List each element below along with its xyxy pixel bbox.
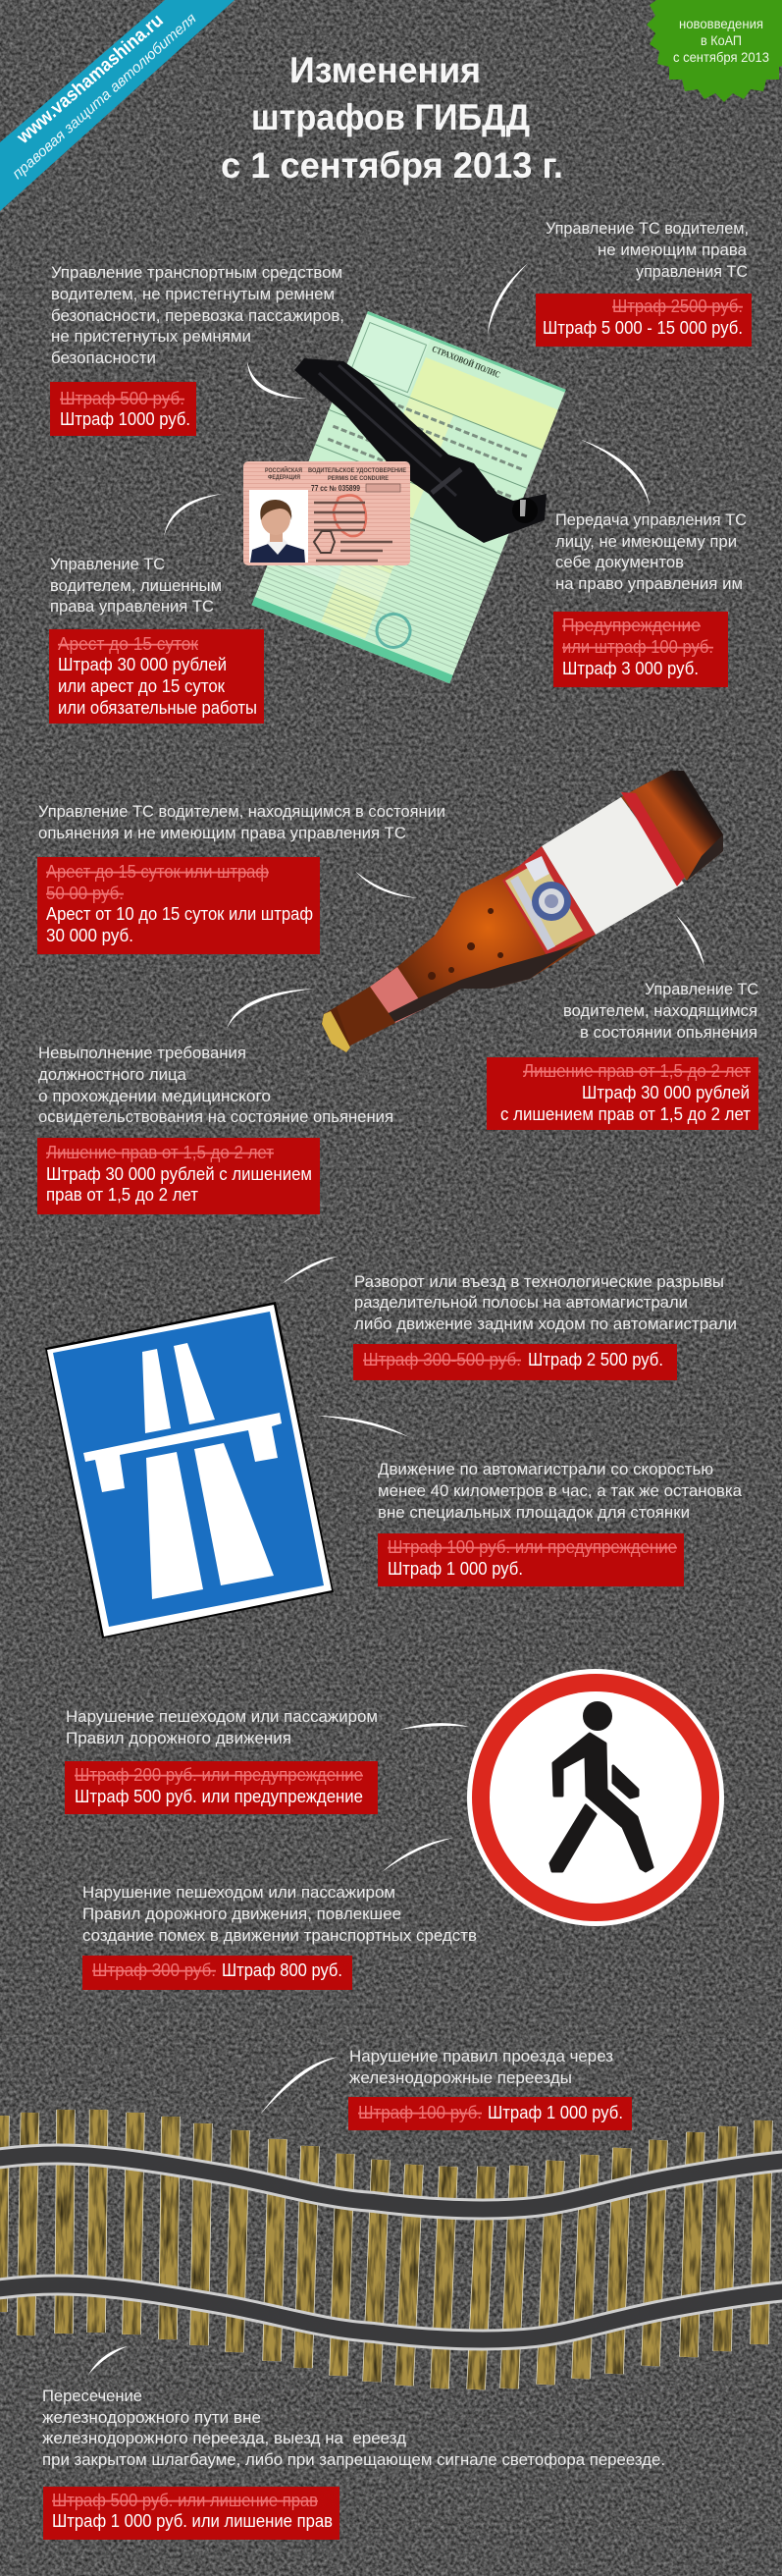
callout: seat belt violation: Штраф 1000 руб. — [60, 409, 190, 429]
callout: crossing tracks outside a level crossing: железнодорожного пути вне — [42, 2408, 261, 2427]
callout: slow driving on motorway: Движение по автомагистрали со скоростью — [378, 1460, 713, 1478]
callout: driving without licence: Штраф 2500 руб. — [612, 296, 743, 316]
callout: crossing tracks outside a level crossing: Пересечение — [42, 2387, 142, 2405]
callout: seat belt violation: водителем, не пристегнутым ремнем — [51, 285, 335, 303]
callout: pedestrian violation obstructing traffic: Штраф 300 руб. — [92, 1960, 216, 1980]
callout: transfer of control to person without documents: или штраф 100 руб. — [562, 637, 713, 657]
callout: driving without licence: Штраф 5 000 - 15 000 руб. — [543, 318, 743, 338]
callout: drunk driver: в состоянии опьянения — [580, 1023, 757, 1042]
title: штрафов ГИБДД — [251, 97, 530, 137]
callout: refusal of medical examination: о прохождении медицинского — [38, 1087, 271, 1105]
illustration: driving licence: ФЕДЕРАЦИЯ — [268, 475, 300, 481]
illustration: beer bottle — [322, 771, 723, 1052]
callout: pedestrian violation obstructing traffic: Штраф 800 руб. — [222, 1960, 342, 1980]
callout: drunk driver: Штраф 30 000 рублей — [582, 1083, 750, 1102]
badge: new in the administrative code: нововведения — [679, 16, 763, 31]
callout: refusal of medical examination: Штраф 30 000 рублей с лишением — [46, 1164, 312, 1184]
illustration: railway track — [0, 2110, 782, 2389]
callout: slow driving on motorway: вне специальных площадок для стоянки — [378, 1503, 690, 1522]
callout: seat belt violation: Штраф 500 руб. — [60, 389, 184, 408]
title — [221, 50, 563, 186]
callout: railway crossing rules: Штраф 1 000 руб. — [488, 2103, 623, 2122]
icon: no pedestrians sign — [467, 1669, 724, 1926]
sleeper edge highlights — [0, 2110, 763, 2389]
callout: crossing tracks outside a level crossing: при закрытом шлагбауме, либо при запрещающем сигнале светофора переезде. — [42, 2450, 665, 2469]
icon: motorway sign — [45, 1302, 334, 1638]
callout: driver stripped of licence: Арест до 15 суток — [58, 634, 198, 654]
callout: transfer of control to person without documents: лицу, не имеющему при — [555, 532, 737, 551]
callout: U-turn on motorway: либо движение задним ходом по автомагистрали — [354, 1315, 737, 1333]
callout: driver stripped of licence: водителем, лишенным — [50, 576, 222, 595]
callout: pedestrian violation obstructing traffic: создание помех в движении транспортных средств — [82, 1926, 477, 1945]
title: с 1 сентября 2013 г. — [221, 145, 563, 186]
callout: seat belt violation: не пристегнутых ремнями — [51, 327, 251, 346]
callout: crossing tracks outside a level crossing: Штраф 500 руб. или лишение прав — [52, 2491, 318, 2510]
callout: driver stripped of licence: Штраф 30 000 рублей — [58, 655, 227, 674]
callout: transfer of control to person without documents: себе документов — [555, 553, 684, 571]
callout: pedestrian violation obstructing traffic: Правил дорожного движения, повлекшее — [82, 1905, 401, 1923]
callout: railway crossing rules — [260, 2047, 632, 2130]
callout: refusal of medical examination: Невыполнение требования — [38, 1044, 246, 1062]
illustration: insurance policy: СТРАХОВОЙ ПОЛИС — [431, 344, 501, 380]
callout: U-turn on motorway: разделительной полосы на автомагистрали — [354, 1293, 688, 1312]
callout: seat belt violation: Управление транспортным средством — [51, 263, 342, 282]
illustration: driving licence: 77 cc № 035899 — [311, 484, 360, 493]
ribbon: site name — [0, 0, 235, 211]
callout: pedestrian violation: Нарушение пешеходом или пассажиром — [66, 1707, 378, 1726]
callout: driver stripped of licence: или арест до 15 суток — [58, 676, 225, 696]
callout: seat belt violation: безопасности, перевозка пассажиров, — [51, 306, 344, 325]
callout: crossing tracks outside a level crossing: Штраф 1 000 руб. или лишение прав — [52, 2511, 333, 2531]
callout: U-turn on motorway — [282, 1257, 737, 1380]
callout: refusal of medical examination: Лишение прав от 1,5 до 2 лет — [46, 1143, 274, 1162]
callout: pedestrian violation obstructing traffic: Нарушение пешеходом или пассажиром — [82, 1883, 395, 1902]
illustration: driving licence: РОССИЙСКАЯ — [265, 466, 302, 474]
callout: pedestrian violation: Штраф 500 руб. или предупреждение — [75, 1787, 363, 1806]
callout: transfer of control to person without documents: Передача управления ТС — [555, 510, 747, 529]
callout: U-turn on motorway: Штраф 300-500 руб. — [363, 1350, 521, 1369]
callout: pedestrian violation: Штраф 200 руб. или предупреждение — [75, 1765, 363, 1785]
railway sleepers — [0, 2110, 763, 2389]
callout: driving without licence: не имеющим права — [598, 241, 748, 259]
title: Изменения — [289, 50, 481, 90]
illustration: driving licence: ВОДИТЕЛЬСКОЕ УДОСТОВЕРЕНИЕ — [308, 468, 406, 474]
callout: drunk driver without licence: 30 000 руб. — [46, 926, 133, 945]
callout: seat belt violation: безопасности — [51, 349, 156, 367]
callout: drunk driver without licence: опьянения и не имеющим права управления ТС — [38, 824, 406, 842]
callout: driving without licence: управления ТС — [636, 262, 748, 281]
callout: pedestrian violation — [65, 1707, 469, 1814]
callout: transfer of control to person without documents: Штраф 3 000 руб. — [562, 659, 699, 678]
callout: transfer of control to person without documents — [553, 439, 747, 687]
callout: driver stripped of licence — [49, 494, 264, 724]
callout: seat belt violation — [50, 263, 344, 436]
callout: drunk driver: Лишение прав от 1,5 до 2 лет — [523, 1061, 751, 1081]
callout: drunk driver without licence: Управление ТС водителем, находящимся в состоянии — [38, 802, 445, 821]
illustration: driving licence: PERMIS DE CONDUIRE — [328, 476, 389, 482]
ribbon: site name: www.vashamashina.ru — [13, 10, 168, 148]
callout: drunk driver without licence: Арест от 10 до 15 суток или штраф — [46, 904, 313, 924]
callout: pedestrian violation: Правил дорожного движения — [66, 1729, 291, 1747]
lower rail — [0, 2284, 782, 2339]
callout: refusal of medical examination — [37, 989, 393, 1214]
callout: pedestrian violation obstructing traffic — [82, 1838, 477, 1990]
callout: drunk driver: Управление ТС — [645, 980, 758, 998]
callout: slow driving on motorway: менее 40 километров в час, а так же остановка — [378, 1481, 743, 1500]
callout: slow driving on motorway: Штраф 100 руб. или предупреждение — [388, 1537, 677, 1557]
callout: slow driving on motorway: Штраф 1 000 руб. — [388, 1559, 523, 1579]
badge: new in the administrative code — [647, 0, 782, 102]
callout: driving without licence — [488, 219, 752, 347]
ribbon: site name: правовая защита автолюбителя — [9, 10, 200, 183]
callout: drunk driver: водителем, находящимся — [563, 1001, 757, 1020]
callout: transfer of control to person without documents: на право управления им — [555, 574, 743, 593]
callout: drunk driver — [487, 915, 758, 1130]
callout: driving without licence: Управление ТС водителем, — [546, 219, 749, 238]
callout: refusal of medical examination: прав от 1,5 до 2 лет — [46, 1185, 198, 1205]
callout: driver stripped of licence: или обязательные работы — [58, 698, 257, 718]
callout: slow driving on motorway — [317, 1416, 743, 1586]
callout: drunk driver without licence: Арест до 15 суток или штраф — [46, 862, 269, 882]
badge: new in the administrative code: в КоАП — [701, 32, 742, 48]
callout: refusal of medical examination: освидетельствования на состояние опьянения — [38, 1107, 393, 1126]
callout: railway crossing rules: Нарушение правил проезда через — [349, 2047, 613, 2066]
callout: drunk driver without licence: 50 00 руб. — [46, 884, 124, 903]
callout: crossing tracks outside a level crossing — [42, 2346, 665, 2540]
callout: railway crossing rules: железнодорожные переезды — [349, 2068, 572, 2087]
callout: railway crossing rules: Штраф 100 руб. — [358, 2103, 482, 2122]
illustration: insurance policy — [251, 311, 566, 683]
callout: U-turn on motorway: Штраф 2 500 руб. — [528, 1350, 663, 1369]
callout: driver stripped of licence: Управление ТС — [50, 555, 165, 573]
illustration: seat belt — [294, 358, 547, 543]
callout: drunk driver without licence — [37, 802, 445, 954]
callout: crossing tracks outside a level crossing: железнодорожного переезда, выезд на ереезд — [42, 2429, 406, 2447]
callout: refusal of medical examination: должностного лица — [38, 1065, 187, 1084]
illustration: driving licence — [243, 461, 410, 565]
callout: transfer of control to person without documents: Предупреждение — [562, 616, 701, 635]
callout: driver stripped of licence: права управления ТС — [50, 597, 214, 616]
badge: new in the administrative code: с сентября 2013 — [673, 49, 769, 65]
callout: drunk driver: с лишением прав от 1,5 до 2 лет — [500, 1104, 751, 1124]
upper rail — [0, 2154, 782, 2209]
callout: U-turn on motorway: Разворот или въезд в технологические разрывы — [354, 1272, 724, 1291]
